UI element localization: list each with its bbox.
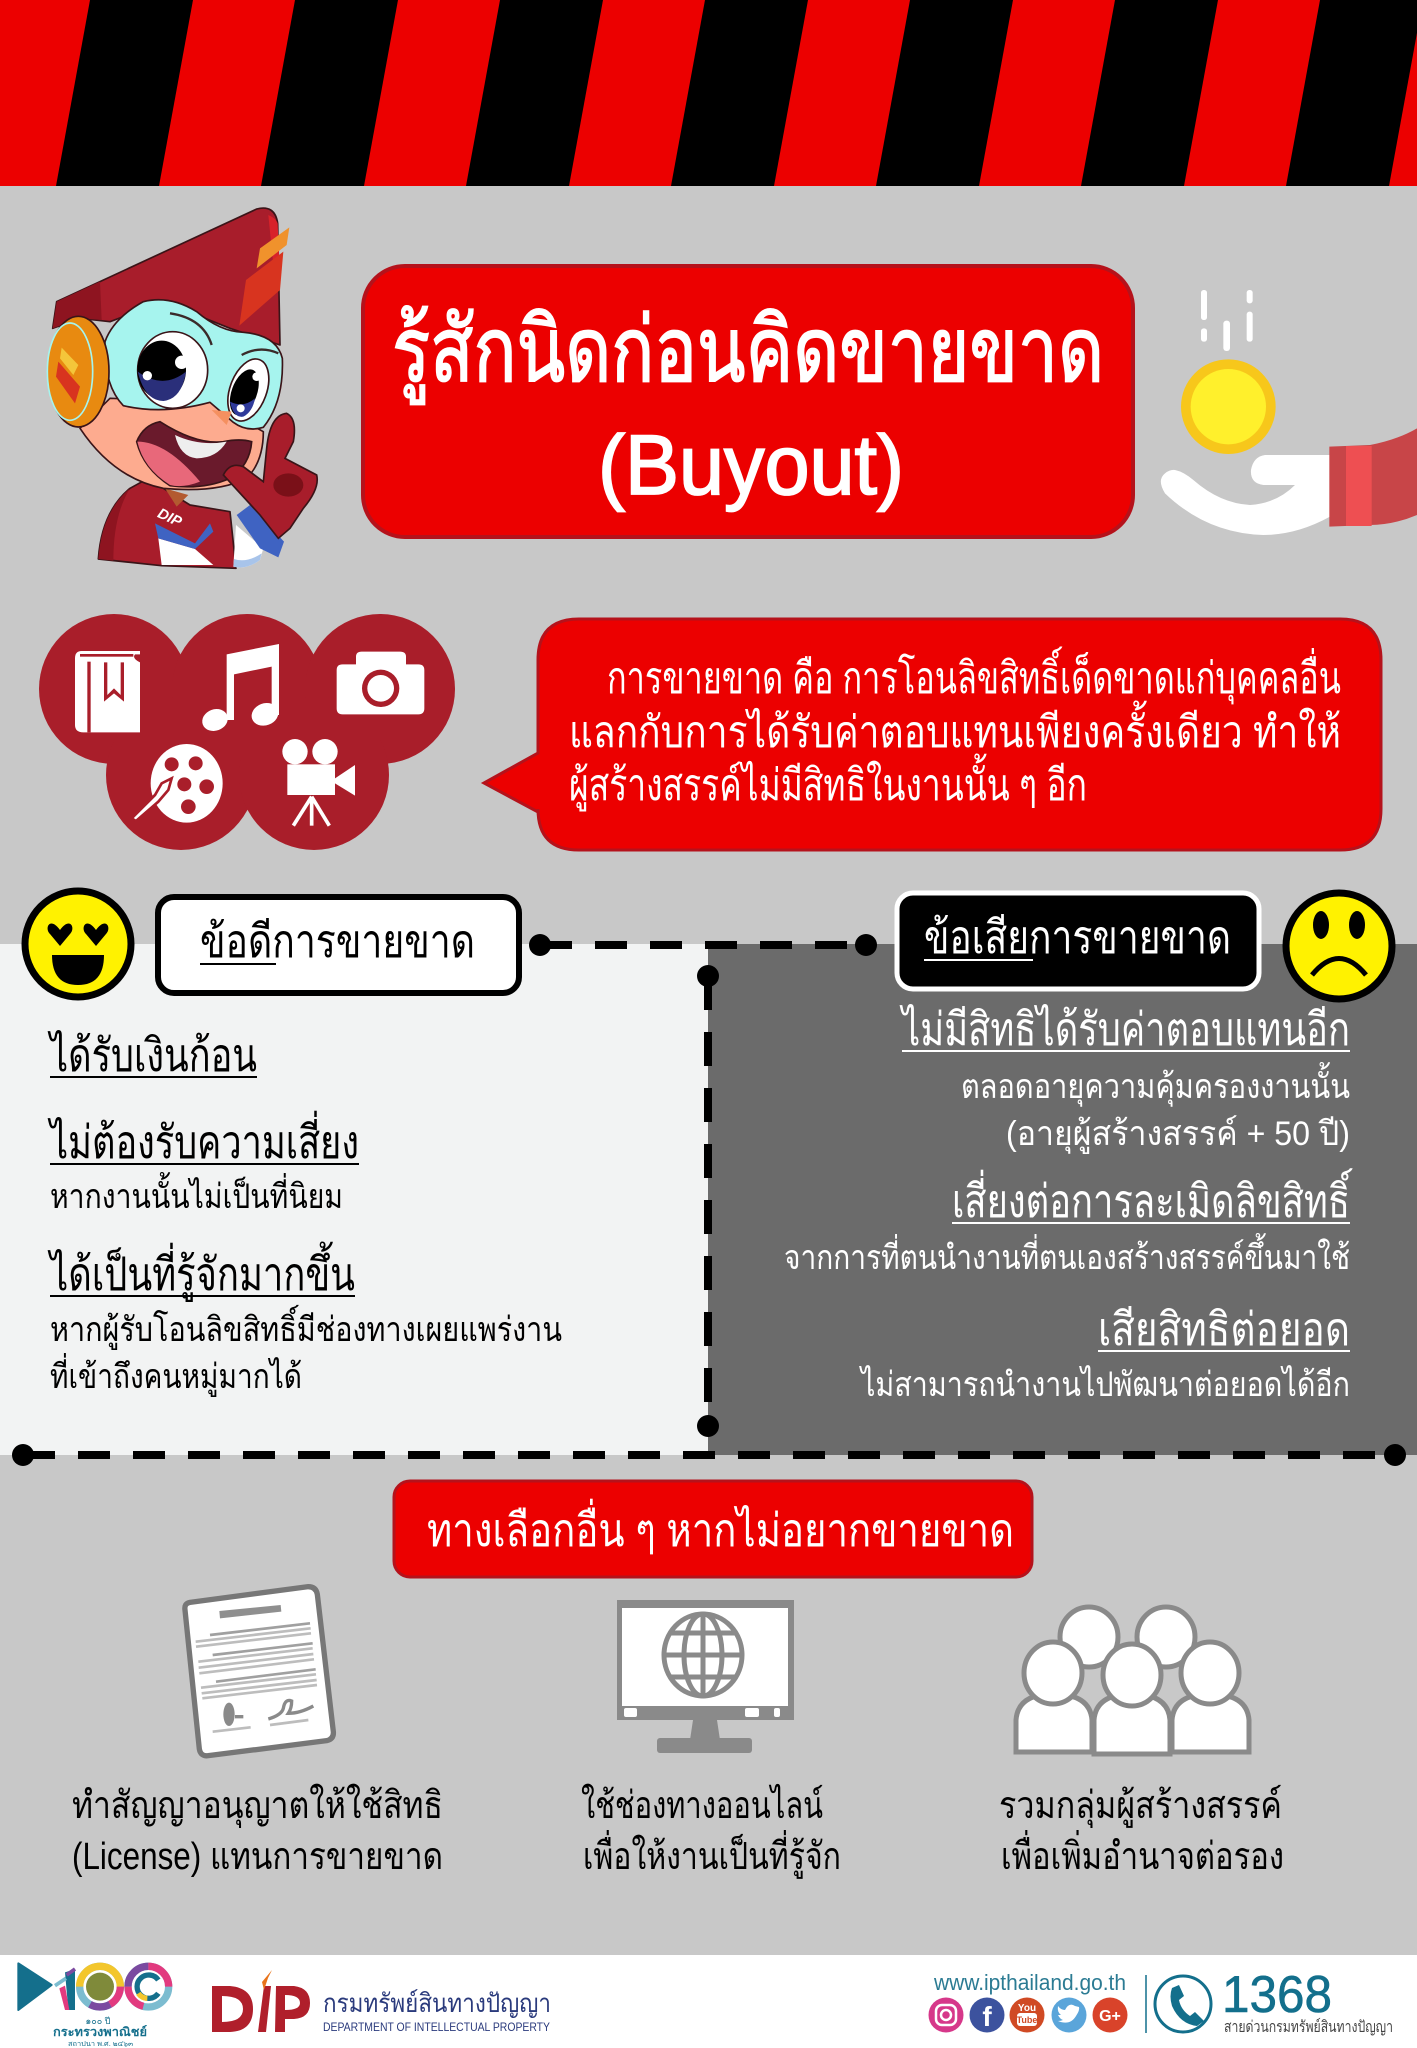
- panel: advantages background: [0, 944, 708, 1455]
- advantages heading tag: [158, 897, 519, 993]
- alternative 1 caption: ทำสัญญาอนุญาตให้ใช้สิทธิ: [72, 1784, 443, 1828]
- icon: camera: [337, 652, 424, 714]
- alternative 3 caption: เพื่อเพิ่มอำนาจต่อรอง: [1001, 1830, 1284, 1878]
- disadvantage 3: [858, 1303, 1350, 1404]
- alternative 2 caption: ใช้ช่องทางออนไลน์: [581, 1784, 823, 1827]
- icon: movie camera: [282, 739, 355, 826]
- social media icons: f: [982, 2001, 992, 2032]
- icon: coin dropping into hand: [1161, 290, 1417, 535]
- alternative 1 caption: (License) แทนการขายขาด: [72, 1836, 443, 1878]
- hotline: 1368: [1222, 1966, 1332, 2024]
- icon: book: [75, 651, 140, 732]
- mascot character: [47, 208, 317, 568]
- department names: กรมทรัพย์สินทางปัญญา: [323, 1988, 551, 2018]
- logo: Ministry of Commerce 100 years: ๑๐๐ ปี: [86, 2016, 111, 2026]
- logo: Ministry of Commerce 100 years: กระทรวงพาณิชย์: [53, 2025, 147, 2039]
- social media icons: G+: [1099, 2008, 1121, 2025]
- advantage 2: ไม่ต้องรับความเสี่ยง: [47, 1110, 359, 1168]
- footer bar: [0, 1955, 1417, 2048]
- logo: Ministry of Commerce 100 years: สถาปนา พ.ศ. ๒๔๖๓: [68, 2041, 133, 2048]
- website url: www.ipthailand.go.th: [933, 1970, 1126, 1995]
- disadvantage 3: เสียสิทธิต่อยอด: [1098, 1303, 1350, 1355]
- icon cluster: creative works: [39, 614, 455, 850]
- disadvantage 1: [899, 1003, 1350, 1154]
- advantage 2: หากงานนั้นไม่เป็นที่นิยม: [50, 1172, 343, 1216]
- globe: [664, 1614, 742, 1696]
- alternatives heading: [394, 1481, 1032, 1577]
- disadvantages heading tag: ข้อเสียการขายขาด: [924, 911, 1231, 963]
- definition text: [569, 646, 1341, 812]
- definition text: ผู้สร้างสรรค์ไม่มีสิทธิในงานนั้น ๆ อีก: [569, 753, 1087, 812]
- disadvantages heading tag: [897, 893, 1259, 989]
- hotline: [1146, 1966, 1393, 2036]
- alternative 2 caption: [581, 1784, 841, 1879]
- icon: heart-eyes smiley: [25, 891, 131, 997]
- alternatives heading: ทางเลือกอื่น ๆ หากไม่อยากขายขาด: [427, 1498, 1014, 1556]
- title line 2: (Buyout): [598, 418, 904, 512]
- mascot character: DIP: [155, 506, 184, 531]
- maroon circle cluster: [39, 614, 455, 850]
- icon: music note: [199, 644, 282, 734]
- social media icons: You: [1018, 2003, 1036, 2014]
- disadvantage 1: ตลอดอายุความคุ้มครองงานนั้น: [961, 1062, 1350, 1107]
- icon: signed contract: [185, 1587, 333, 1756]
- advantage 2: [47, 1110, 359, 1216]
- icon: group of people: [1016, 1607, 1249, 1754]
- panel: disadvantages background: [708, 944, 1417, 1455]
- advantage 1: ได้รับเงินก้อน: [47, 1029, 257, 1081]
- title line 1: รู้สักนิดก่อนคิดขายขาด: [392, 301, 1104, 405]
- disadvantage 2: [784, 1168, 1353, 1277]
- striped header band: [0, 0, 1417, 186]
- logo: DIP department: DEPARTMENT OF INTELLECTUAL PROPERTY: [323, 2020, 550, 2034]
- advantages list: [47, 1029, 562, 1397]
- disadvantage 1: (อายุผู้สร้างสรรค์ + 50 ปี): [1006, 1115, 1350, 1154]
- advantage 3: [47, 1241, 562, 1397]
- alternative 1 caption: [72, 1784, 443, 1878]
- icon: palette: [132, 744, 223, 823]
- icon: monitor with globe: [617, 1600, 794, 1753]
- alternative 3 caption: [999, 1784, 1284, 1878]
- disadvantages list: [784, 1003, 1353, 1404]
- logo: DIP department: [212, 1970, 551, 2034]
- advantage 3: ได้เป็นที่รู้จักมากขึ้น: [47, 1241, 355, 1302]
- title box: [363, 266, 1133, 537]
- social media icons: [928, 1998, 1128, 2032]
- definition speech bubble: [484, 619, 1381, 850]
- dashed connector lines: [12, 934, 1406, 1466]
- icon: sad smiley: [1286, 893, 1392, 999]
- advantage 3: หากผู้รับโอนลิขสิทธิ์มีช่องทางเผยแพร่งาน: [50, 1304, 562, 1350]
- icon: phone: [1155, 1976, 1211, 2032]
- social media icons: Tube: [1017, 2015, 1037, 2025]
- alternative 2 caption: เพื่อให้งานเป็นที่รู้จัก: [583, 1830, 841, 1879]
- logo: Ministry of Commerce 100 years: [18, 1963, 169, 2048]
- alternative 3 caption: รวมกลุ่มผู้สร้างสรรค์: [999, 1784, 1282, 1828]
- advantages heading tag: ข้อดีการขายขาด: [200, 915, 475, 967]
- advantage 3: ที่เข้าถึงคนหมู่มากได้: [50, 1353, 302, 1397]
